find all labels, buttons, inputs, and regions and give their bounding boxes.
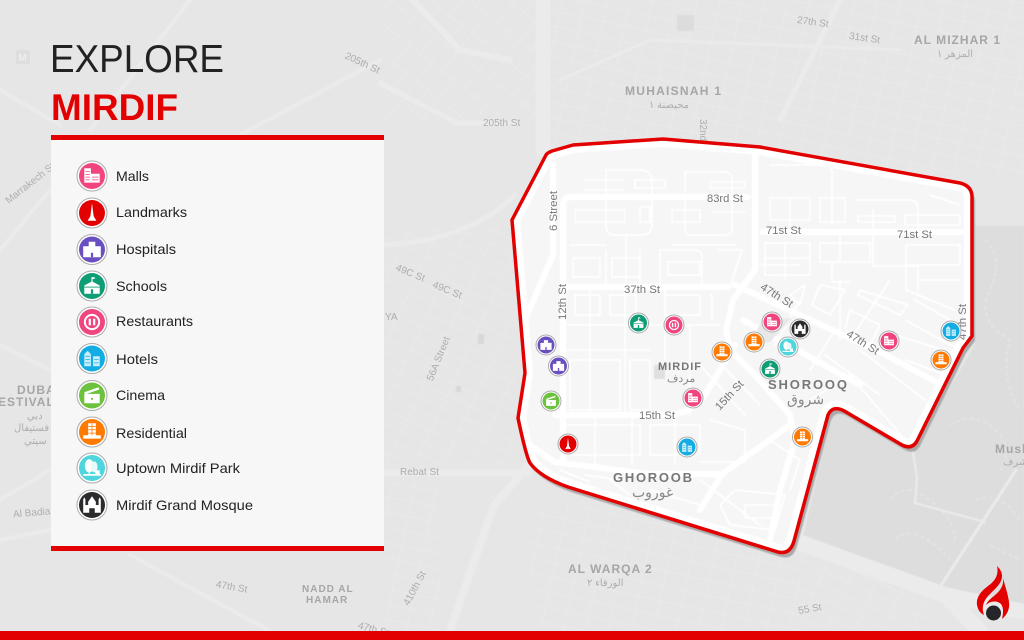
street and district labels: 15th St — [713, 378, 746, 413]
outside map labels: المزهر ١ — [937, 49, 973, 60]
legend: Mirdif Grand Mosque — [77, 490, 253, 520]
outside map labels: 47th St — [357, 621, 390, 639]
legend: Cinema: Cinema — [116, 387, 165, 403]
outside map labels: 49C St — [431, 280, 464, 301]
legend: Restaurants — [77, 307, 193, 337]
street and district labels: 15th St — [639, 410, 675, 422]
street network — [512, 139, 972, 553]
street and district labels — [548, 191, 969, 501]
title: EXPLORE: EXPLORE — [50, 38, 224, 81]
marker: restaurant — [664, 315, 684, 335]
marker: school — [628, 313, 648, 333]
outside map labels: 27th St — [796, 15, 829, 30]
footer bar — [0, 631, 1024, 640]
dark open land — [803, 226, 1024, 610]
outside map labels: Al Badia — [13, 506, 51, 520]
outside map labels: Rebat St — [400, 467, 439, 478]
outside map labels: DUBAI — [17, 383, 60, 397]
legend: Hotels: Hotels — [116, 351, 158, 367]
legend: Malls: Malls — [116, 168, 149, 184]
legend: Schools: Schools — [116, 278, 167, 294]
legend: Cinema — [77, 380, 165, 410]
street and district labels: 83rd St — [707, 193, 743, 205]
icon: flame logo — [977, 566, 1009, 620]
outside map labels: AL MIZHAR 1 — [914, 33, 1001, 47]
marker: cinema — [541, 391, 561, 411]
marker: residential — [931, 350, 951, 370]
marker: hotel — [941, 321, 961, 341]
street and district labels: 12th St — [557, 284, 569, 320]
street and district labels: 71st St — [897, 229, 932, 241]
outside map labels: محيصنة ١ — [649, 100, 689, 111]
marker: residential — [744, 332, 764, 352]
outside map labels: 55 St — [797, 602, 823, 617]
marker: residential — [712, 342, 732, 362]
street and district labels: GHOROOB — [613, 470, 692, 485]
street and district labels: شروق — [787, 391, 824, 408]
outside map labels: 32nd — [697, 119, 708, 141]
outside map labels: HAMAR — [306, 595, 348, 606]
legend: Schools — [77, 271, 167, 301]
legend: Residential — [77, 417, 187, 447]
street and district labels: 47th St — [758, 281, 795, 310]
marker: mall — [879, 331, 899, 351]
marker: landmark — [558, 434, 578, 454]
marker: hotel — [677, 437, 697, 457]
outside map labels: YA — [385, 312, 398, 323]
outside map labels: دبي — [27, 411, 43, 422]
map markers — [536, 312, 961, 457]
legend: Landmarks — [77, 198, 187, 228]
legend: Malls — [77, 161, 149, 191]
street and district labels: غوروب — [632, 484, 673, 501]
legend: Landmarks: Landmarks — [116, 204, 187, 220]
marker: mall — [683, 388, 703, 408]
outside map labels: MUHAISNAH 1 — [625, 84, 722, 98]
outside map labels: 205th St — [343, 51, 382, 77]
legend: Hospitals: Hospitals — [116, 241, 176, 257]
marker: mosque — [790, 319, 810, 339]
title: MIRDIF: MIRDIF — [51, 87, 178, 128]
outside map labels: سيتي — [24, 436, 47, 447]
outside map labels: 49C St — [394, 263, 427, 284]
street and district labels: 37th St — [624, 284, 660, 296]
outside map labels: NADD AL — [302, 584, 354, 595]
street and district labels: 47th St — [957, 304, 969, 340]
legend: Residential: Residential — [116, 425, 187, 441]
marker: residential — [792, 427, 812, 447]
outside map labels: فستيفال — [14, 423, 49, 434]
street and district labels: 47th St — [844, 328, 881, 357]
outside map labels: 56A Street — [425, 335, 453, 383]
street and district labels: 71st St — [766, 225, 801, 237]
panel: legend — [51, 135, 384, 551]
legend: Restaurants: Restaurants — [116, 313, 193, 329]
street and district labels: 6 Street — [548, 191, 560, 231]
street and district labels: SHOROOQ — [768, 377, 847, 392]
legend: Uptown Mirdif Park: Uptown Mirdif Park — [116, 460, 241, 476]
marker: hospital — [548, 356, 568, 376]
marker: school — [760, 359, 780, 379]
outside map labels: الورقاء ٢ — [587, 578, 624, 589]
legend: Uptown Mirdif Park — [77, 453, 241, 483]
street and district labels: مردف — [667, 373, 695, 385]
outside map labels: 205th St — [483, 118, 520, 129]
outside map labels: AL WARQA 2 — [568, 562, 653, 576]
boundary line — [512, 139, 972, 553]
street and district labels: MIRDIF — [658, 361, 701, 373]
legend: Hospitals — [77, 234, 176, 264]
outside map labels: 31st St — [848, 31, 881, 46]
outside map labels: 410th St — [402, 569, 429, 608]
outside map labels: 47th St — [215, 579, 248, 596]
outside map labels: M — [18, 53, 27, 64]
outside map labels: Marrakech St — [4, 161, 57, 206]
marker: park — [778, 337, 798, 357]
marker: mall — [762, 312, 782, 332]
legend: Hotels — [77, 344, 158, 374]
marker: hospital — [536, 335, 556, 355]
legend: Mirdif Grand Mosque: Mirdif Grand Mosque — [116, 497, 253, 513]
map area: Mirdif boundary — [512, 139, 975, 558]
